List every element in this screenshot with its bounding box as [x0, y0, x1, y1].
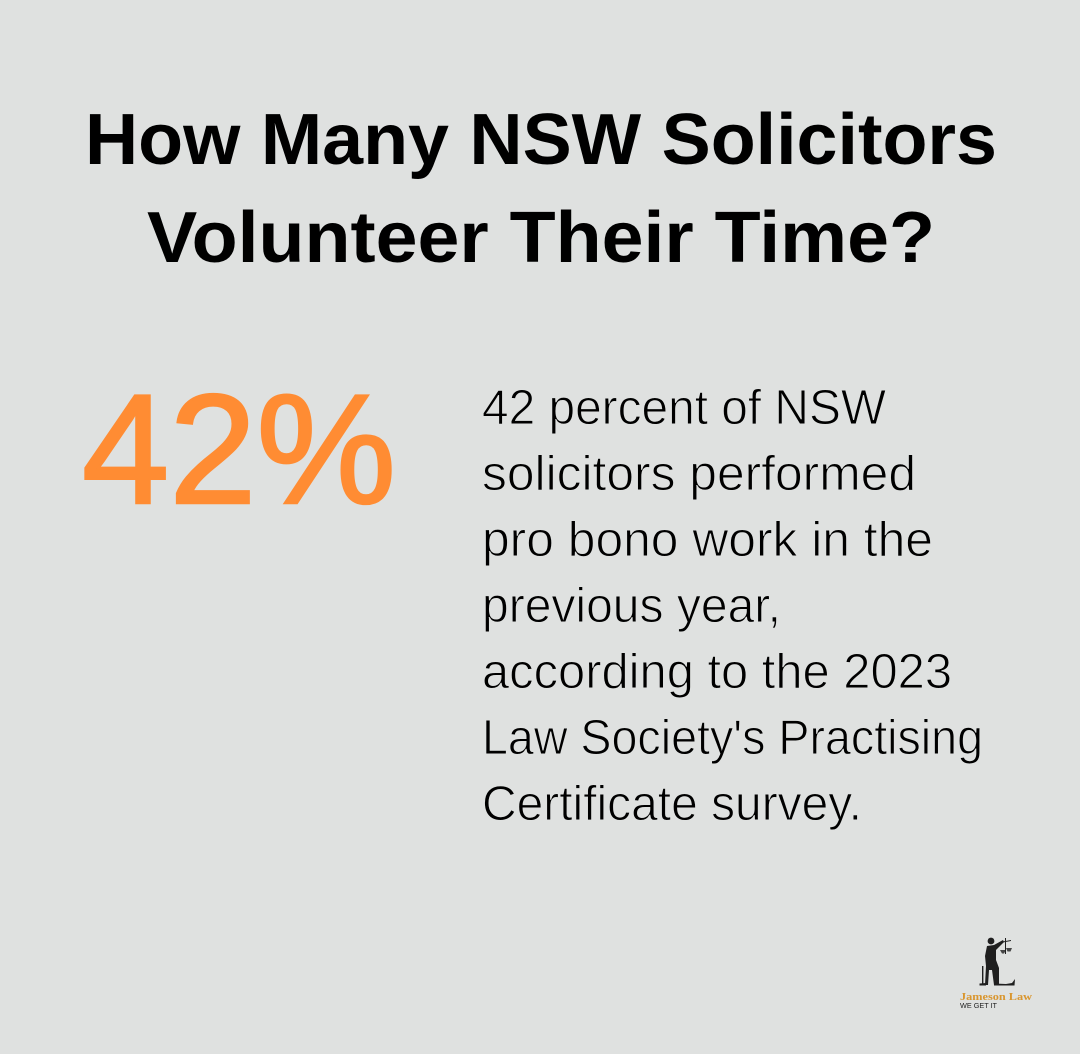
logo tagline: WE GET IT	[960, 1001, 997, 1010]
title: Volunteer Their Time?	[147, 198, 935, 278]
logo wordmark: Jameson Law	[960, 991, 1032, 1003]
description text: pro bono work in the	[482, 513, 933, 567]
title	[85, 100, 997, 278]
description text: previous year,	[482, 579, 781, 633]
description text	[482, 381, 983, 831]
logo: Jameson Law	[960, 938, 1032, 1010]
description text: according to the 2023	[482, 645, 952, 699]
title: How Many NSW Solicitors	[85, 100, 997, 180]
description text: solicitors performed	[482, 447, 916, 501]
description text: 42 percent of NSW	[482, 381, 887, 435]
icon: lady justice with scales and letter L	[980, 938, 1015, 986]
big statistic: 42%: 42%	[82, 363, 396, 537]
description text: Law Society's Practising	[482, 711, 983, 765]
description text: Certificate survey.	[482, 777, 862, 831]
